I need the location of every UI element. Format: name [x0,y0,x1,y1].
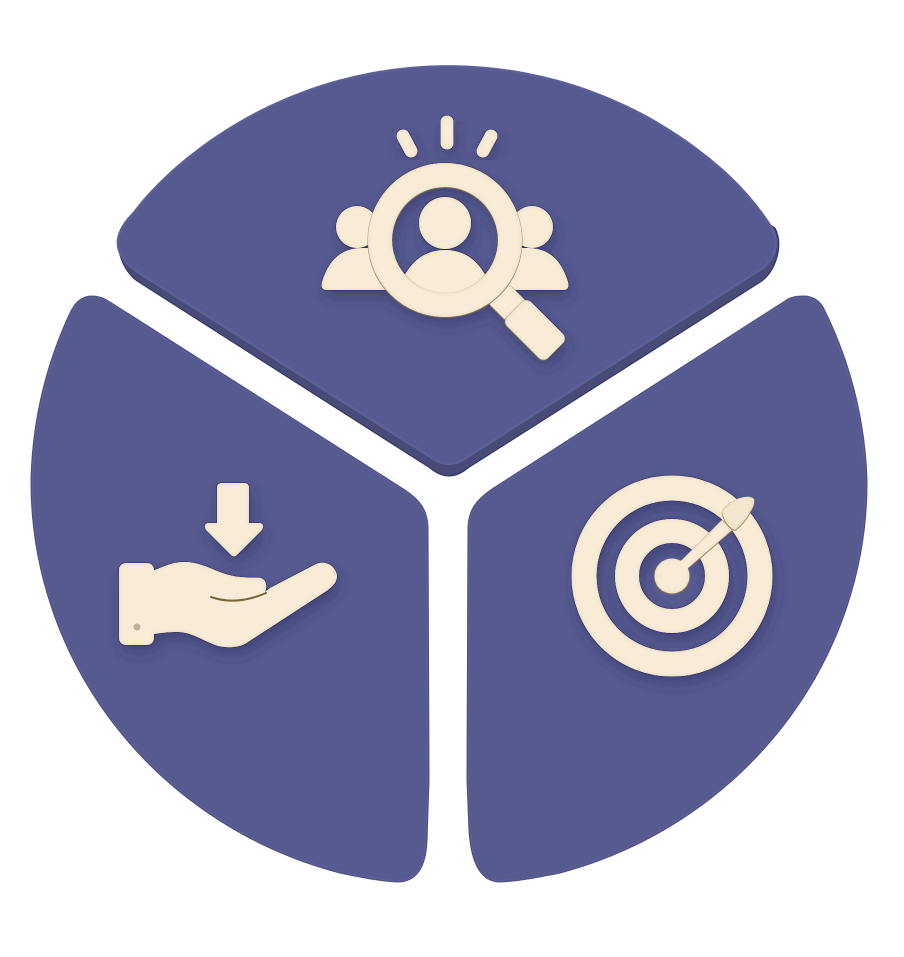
icon: open hand and shirt cuff [119,562,337,647]
icon: magnifier handle grip [502,297,568,363]
icon: hand receiving arrow [119,483,337,647]
panel: top segment [117,65,779,476]
infographic: three-segment circle [30,65,868,882]
icon: magnifying glass over people [322,122,568,363]
icon: target with dart [584,488,760,664]
icon: dart tip [722,497,754,530]
icon: magnifier shadow base [322,175,568,363]
icon: cuff button [134,624,140,630]
icon: bullseye and dart shaft [654,520,732,594]
icon: middle ring [627,531,717,621]
icon: magnifier ring [380,175,510,305]
icon: down arrow [205,483,263,556]
icon: magnifier handle neck [495,290,520,315]
icon: attention rays [403,122,491,151]
icon: hand thumb crease [211,593,266,601]
panel: left segment [31,296,429,882]
icon: outer ring [584,488,760,664]
panel: right segment [467,296,867,882]
